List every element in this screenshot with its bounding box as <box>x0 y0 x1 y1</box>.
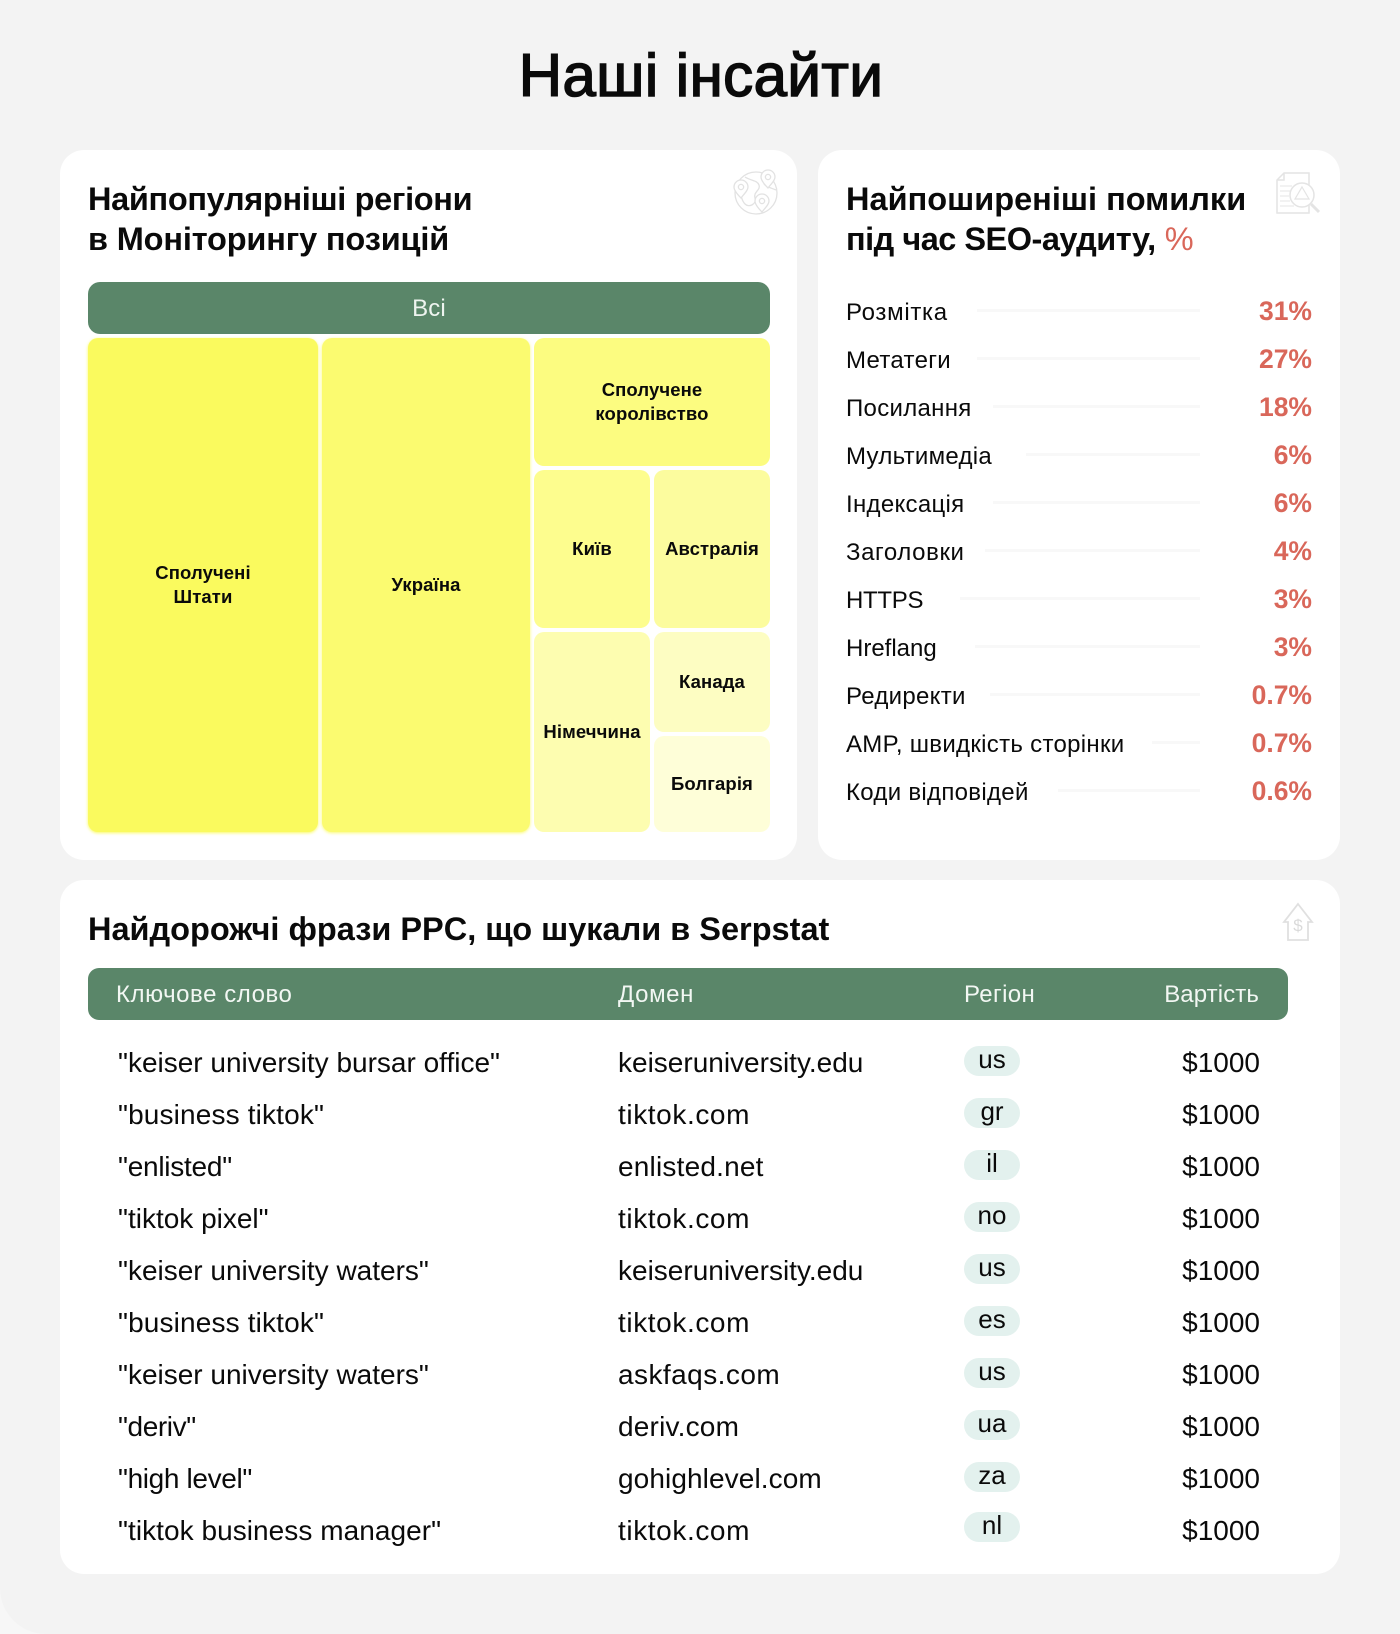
table row 4: no <box>978 1200 1006 1230</box>
cell: Ukraine: Україна <box>391 574 461 595</box>
table row 10 <box>118 1510 1260 1546</box>
row: redirects: Редиректи <box>846 683 966 710</box>
cell: United States: Штати <box>174 586 232 607</box>
panel: expensive PPC phrases <box>60 880 1340 1574</box>
treemap header: all: Всі <box>412 295 446 322</box>
table row 2: tiktok.com <box>618 1099 750 1130</box>
row: meta tags: Метатеги <box>846 347 951 374</box>
cell: United States <box>88 338 318 832</box>
row: indexing: Індексація <box>846 491 964 518</box>
table row 8: $1000 <box>1182 1411 1260 1442</box>
column header: keyword: Ключове слово <box>116 981 292 1008</box>
cell: Bulgaria <box>654 736 770 832</box>
table row 10: "tiktok business manager" <box>118 1515 441 1546</box>
table row 2: $1000 <box>1182 1099 1260 1130</box>
row: headings: Заголовки <box>846 539 965 566</box>
cell: Germany <box>534 632 650 832</box>
row: HTTPS: 3% <box>1274 584 1312 614</box>
table row 7: askfaqs.com <box>618 1359 780 1390</box>
cell: Ukraine <box>322 338 530 832</box>
table row 5: keiseruniversity.edu <box>618 1255 863 1286</box>
table row 7: $1000 <box>1182 1359 1260 1390</box>
panel: SEO audit errors <box>818 150 1340 860</box>
table body <box>118 1044 1260 1546</box>
cell: United Kingdom <box>534 338 770 466</box>
row: redirects <box>846 680 1312 710</box>
row: headings <box>846 536 1312 566</box>
table row 4: $1000 <box>1182 1203 1260 1234</box>
row: Hreflang: Hreflang <box>846 635 937 662</box>
cell: Kyiv <box>534 470 650 628</box>
icon: house with dollar <box>1282 902 1314 941</box>
column header: domain: Домен <box>618 981 694 1008</box>
table row 10: tiktok.com <box>618 1515 750 1546</box>
row: AMP, page speed: 0.7% <box>1252 728 1312 758</box>
treemap <box>86 282 770 836</box>
cell: Australia: Австралія <box>665 538 759 559</box>
icon: house with dollar: $ <box>1293 916 1303 935</box>
table row 4 <box>118 1200 1260 1234</box>
row: AMP, page speed <box>846 728 1312 758</box>
table row 2 <box>118 1096 1260 1130</box>
row: headings: 4% <box>1274 536 1312 566</box>
table row 4: "tiktok pixel" <box>118 1203 269 1234</box>
panel: popular regions <box>60 150 797 860</box>
table row 6: es <box>978 1304 1006 1334</box>
cell: United Kingdom: Сполучене <box>602 379 702 400</box>
title: Наші інсайти <box>519 42 883 109</box>
row: HTTPS <box>846 584 1312 614</box>
table row 6 <box>118 1304 1260 1338</box>
row: indexing <box>846 488 1312 518</box>
heading: SEO audit errors: Найпоширеніші помилки <box>846 181 1246 217</box>
icon: document with warning magnifier <box>1276 172 1320 214</box>
table row 2: gr <box>980 1096 1004 1126</box>
table row 1: us <box>978 1044 1006 1074</box>
table row 2: "business tiktok" <box>118 1099 324 1130</box>
table row 5: "keiser university waters" <box>118 1255 429 1286</box>
row: multimedia: Мультимедіа <box>846 443 992 470</box>
heading: popular regions <box>88 181 472 257</box>
table row 1: $1000 <box>1182 1047 1260 1078</box>
row: multimedia <box>846 440 1312 470</box>
table row 3: $1000 <box>1182 1151 1260 1182</box>
table row 3: enlisted.net <box>618 1151 764 1182</box>
row: links: 18% <box>1259 392 1312 422</box>
icon: globe with pins <box>734 170 778 214</box>
row: markup: Розмітка <box>846 299 948 326</box>
row: response codes <box>846 776 1312 806</box>
table row 5 <box>118 1252 1260 1286</box>
table row 10: nl <box>982 1510 1002 1540</box>
row: meta tags <box>846 344 1312 374</box>
table row 3: "enlisted" <box>118 1151 232 1182</box>
cell: Canada: Канада <box>679 671 745 692</box>
table row 7: us <box>978 1356 1006 1386</box>
cell: Germany: Німеччина <box>543 721 641 742</box>
table row 6: tiktok.com <box>618 1307 750 1338</box>
table row 3 <box>118 1148 1260 1182</box>
table row 9: $1000 <box>1182 1463 1260 1494</box>
list: SEO errors <box>846 296 1312 806</box>
table row 7: "keiser university waters" <box>118 1359 429 1390</box>
table row 10: $1000 <box>1182 1515 1260 1546</box>
row: response codes: Коди відповідей <box>846 779 1029 806</box>
table row 8: deriv.com <box>618 1411 739 1442</box>
row: links: Посилання <box>846 395 972 422</box>
heading: SEO audit errors: під час SEO-аудиту, % <box>846 221 1194 257</box>
row: Hreflang: 3% <box>1274 632 1312 662</box>
table row 9: gohighlevel.com <box>618 1463 822 1494</box>
heading: popular regions: в Моніторингу позицій <box>88 221 449 257</box>
cell: United Kingdom: королівство <box>595 403 709 424</box>
table row 1: "keiser university bursar office" <box>118 1047 500 1078</box>
row: markup: 31% <box>1259 296 1312 326</box>
table header <box>88 968 1288 1020</box>
row: markup <box>846 296 1312 326</box>
table row 5: $1000 <box>1182 1255 1260 1286</box>
row: multimedia: 6% <box>1274 440 1312 470</box>
heading: popular regions: Найпопулярніші регіони <box>88 181 472 217</box>
table row 3: il <box>986 1148 998 1178</box>
table row 6: "business tiktok" <box>118 1307 324 1338</box>
table row 1 <box>118 1044 1260 1078</box>
table row 8: ua <box>978 1408 1006 1438</box>
table row 5: us <box>978 1252 1006 1282</box>
heading: expensive PPC phrases: Найдорожчі фрази PPC, що шукали в Serpstat <box>88 911 829 947</box>
table row 4: tiktok.com <box>618 1203 750 1234</box>
heading: SEO audit errors <box>846 181 1246 257</box>
table row 6: $1000 <box>1182 1307 1260 1338</box>
table row 9: "high level" <box>118 1463 252 1494</box>
treemap header: all <box>88 282 770 334</box>
row: Hreflang <box>846 632 1312 662</box>
column header: cost: Вартість <box>1164 981 1259 1008</box>
table row 9: za <box>978 1460 1006 1490</box>
table row 9 <box>118 1460 1260 1494</box>
cell: Kyiv: Київ <box>572 538 612 559</box>
column header: region: Регіон <box>964 981 1035 1008</box>
cell: Canada <box>654 632 770 732</box>
cell: Australia <box>654 470 770 628</box>
row: links <box>846 392 1312 422</box>
table row 8: "deriv" <box>118 1411 196 1442</box>
cell: Bulgaria: Болгарія <box>671 773 753 794</box>
cell: United States: Сполучені <box>155 562 251 583</box>
table row 7 <box>118 1356 1260 1390</box>
row: meta tags: 27% <box>1259 344 1312 374</box>
row: response codes: 0.6% <box>1252 776 1312 806</box>
row: redirects: 0.7% <box>1252 680 1312 710</box>
table row 1: keiseruniversity.edu <box>618 1047 863 1078</box>
row: AMP, page speed: AMP, швидкість сторінки <box>846 731 1124 758</box>
row: indexing: 6% <box>1274 488 1312 518</box>
table row 8 <box>118 1408 1260 1442</box>
row: HTTPS: HTTPS <box>846 587 923 614</box>
